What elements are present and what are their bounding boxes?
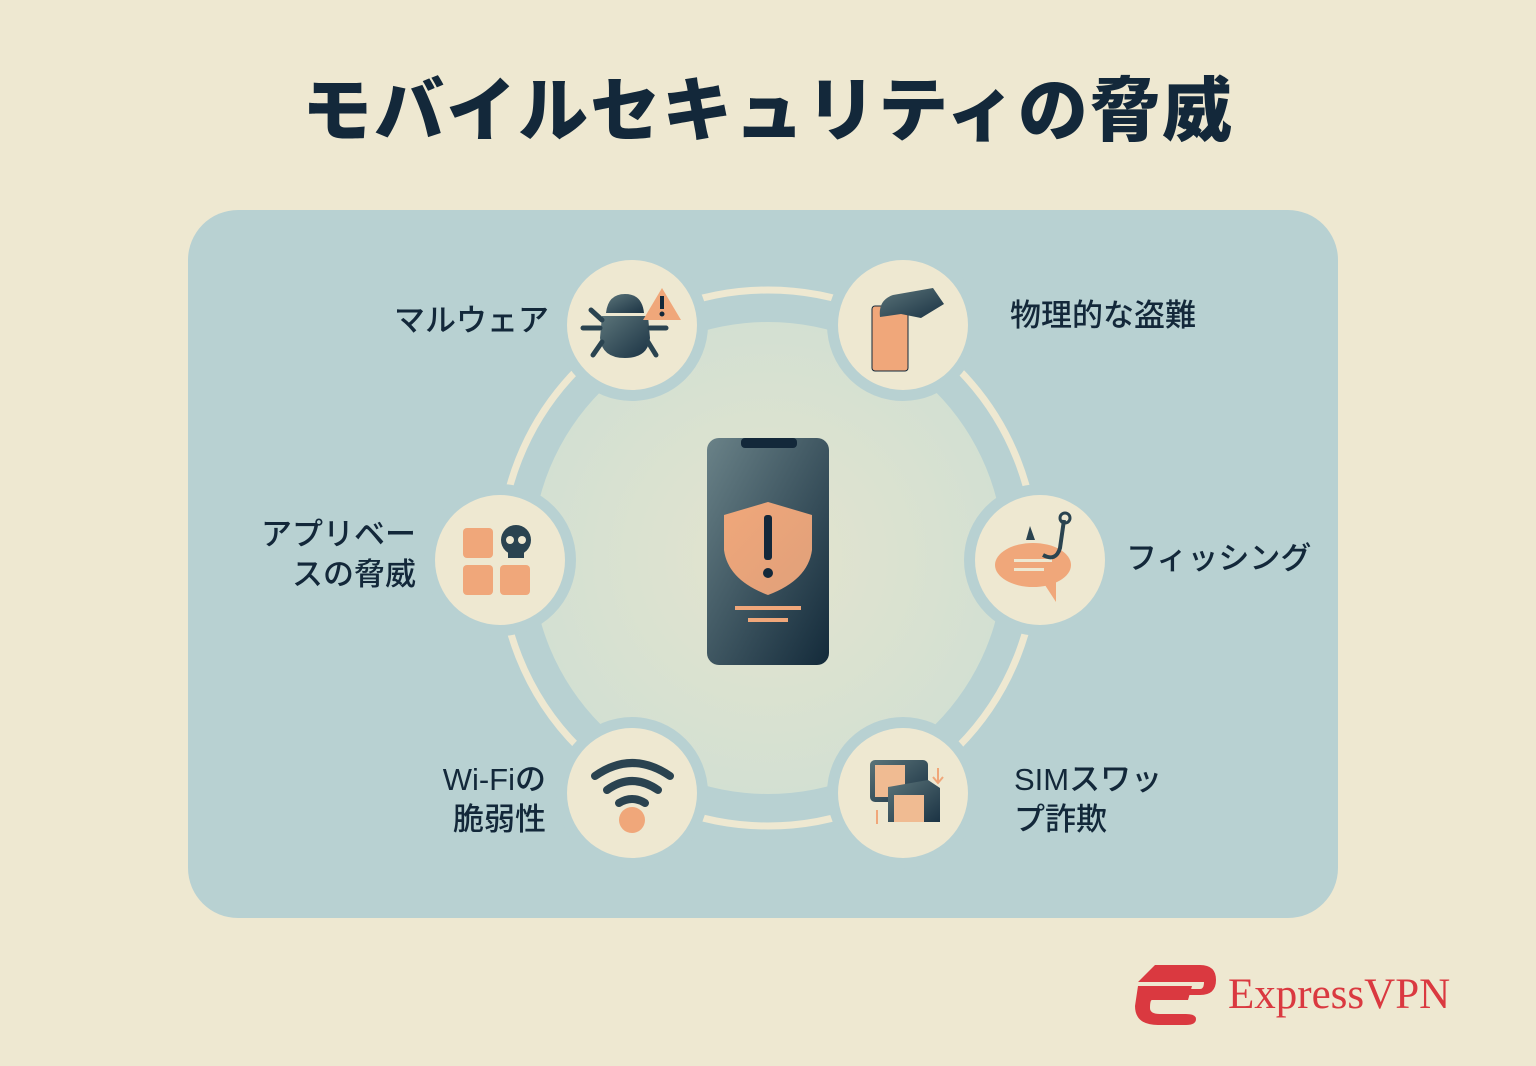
label: sim swap (1014, 762, 1162, 837)
inner disk (532, 322, 1004, 794)
icon: apps (463, 525, 531, 595)
label: phishing: フィッシング (1126, 541, 1311, 576)
icon: wifi (595, 763, 670, 833)
label: sim swap: SIMスワッ (1014, 762, 1162, 797)
label: sim swap: プ詐欺 (1014, 802, 1107, 837)
icon: sim (870, 760, 943, 824)
panel: diagram (188, 210, 1338, 918)
label: wifi (442, 762, 546, 837)
logo (1135, 965, 1450, 1025)
label: wifi: Wi-Fiの (443, 762, 546, 797)
phone (707, 438, 829, 665)
label: malware: マルウェア (394, 303, 549, 338)
label: app threats: スの脅威 (292, 557, 416, 592)
label: theft: 物理的な盗難 (1010, 298, 1196, 333)
icon: theft (872, 288, 944, 371)
label: app threats (261, 517, 416, 592)
label: app threats: アプリベー (261, 517, 416, 552)
label: wifi: 脆弱性 (453, 802, 546, 837)
icon: bug (583, 288, 681, 358)
logo: ExpressVPN (1228, 971, 1450, 1018)
title: モバイルセキュリティの脅威 (302, 72, 1234, 150)
icon: phishing (995, 513, 1071, 602)
